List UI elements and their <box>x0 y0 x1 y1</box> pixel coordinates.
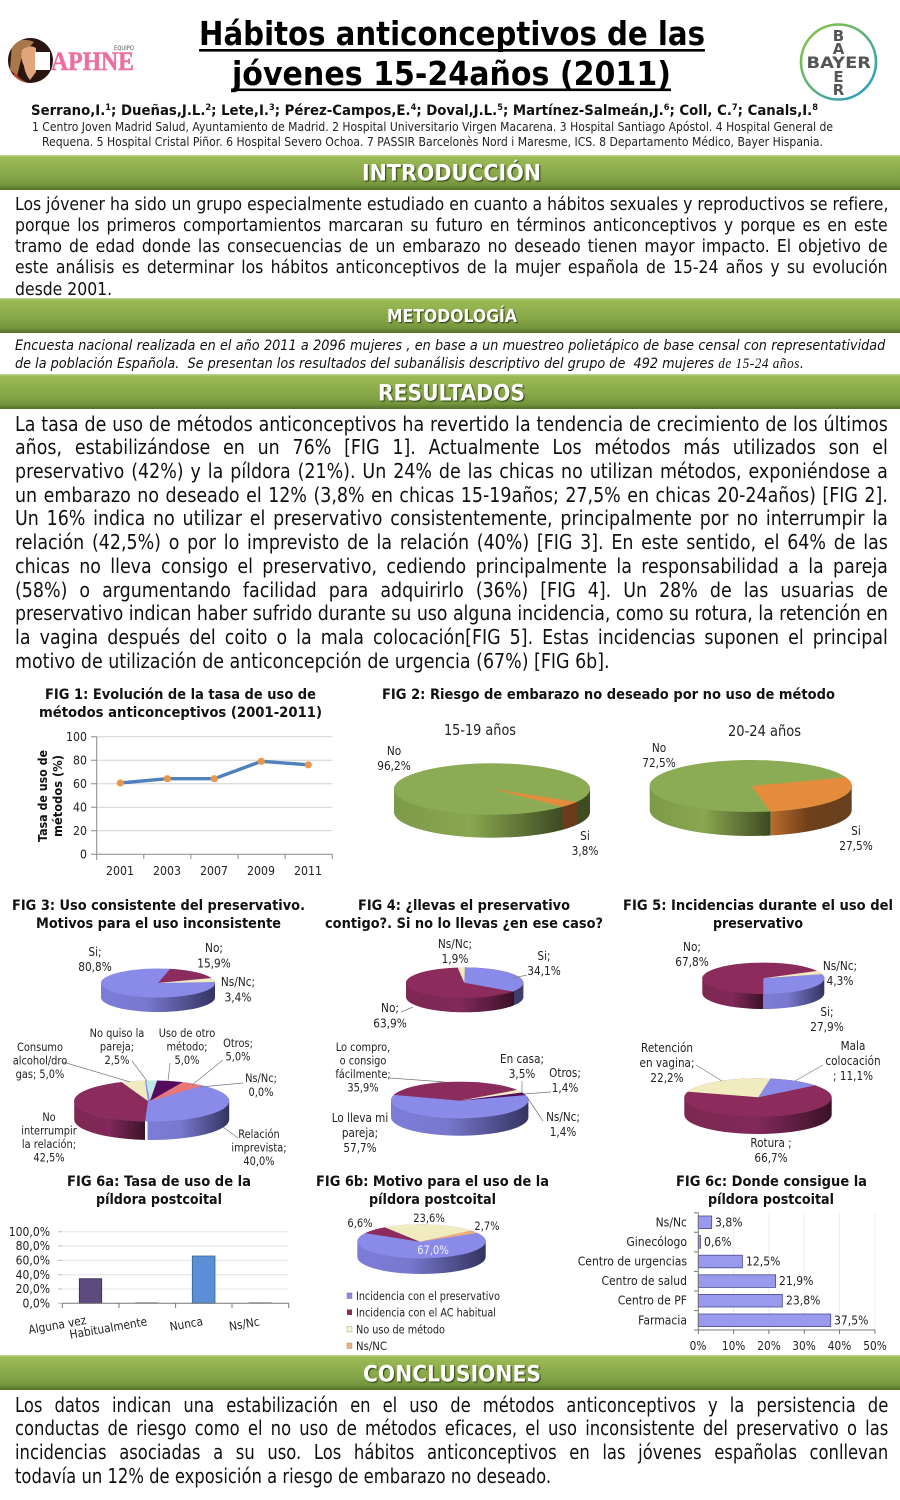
authors: 1 <box>105 103 111 113</box>
pie chart: fig 4 reasons: 57,7% <box>343 1141 377 1155</box>
bar chart: fig 6a: 20,0% <box>16 1281 50 1296</box>
line chart: fig 1: 20 <box>73 823 87 838</box>
pie chart: fig 4 carry: No; <box>381 1001 399 1015</box>
heading: fig 6a: FIG 6a: Tasa de uso de la <box>67 1174 251 1190</box>
pie chart: fig 2, 20-24 años: 27,5% <box>839 839 873 853</box>
text block: introducción <box>15 194 888 300</box>
pie chart: fig 5 incidents: No; <box>683 940 701 954</box>
title: Hábitos anticonceptivos de las <box>199 14 705 53</box>
text block: conclusiones: conductas de riesgo como el no uso de métodos eficaces, el uso inconsistente del preservativo o las <box>15 1416 888 1440</box>
line chart: fig 1: Tasa de uso de <box>35 750 50 842</box>
text block: introducción: tramo de edad donde las consecuencias de un embarazo no deseado tienen mayor impacto. El objetivo de <box>15 236 888 257</box>
pie chart: fig 3 reasons: Consumo <box>17 1041 63 1054</box>
pie chart: fig 2, 15-19 años <box>378 723 598 856</box>
pie chart: fig 4 carry <box>374 939 560 1029</box>
bar chart: fig 6c: 12,5% <box>746 1254 780 1269</box>
bar chart: fig 6a <box>9 1224 289 1342</box>
pie chart: fig 4 reasons: pareja; <box>342 1126 378 1140</box>
line chart: fig 1: 2009 <box>247 863 275 878</box>
pie chart: fig 4 reasons: Lo lleva mi <box>332 1111 388 1125</box>
pie chart: fig 3 reasons: método; <box>166 1041 208 1054</box>
heading: fig 6c <box>676 1174 867 1208</box>
authors: 6 <box>664 103 669 113</box>
bar chart: fig 6c: Ns/Nc <box>656 1215 687 1230</box>
heading: fig 1 <box>39 687 322 721</box>
pie chart: fig 3 reasons: la relación; <box>22 1138 76 1151</box>
pie chart: fig 5 types: en vagina; <box>640 1056 694 1070</box>
heading: fig 6c: píldora postcoital <box>708 1192 834 1208</box>
pie chart: fig 3 reasons: imprevista; <box>231 1142 287 1155</box>
pie chart: fig 5 incidents <box>676 942 856 1032</box>
pie chart: fig 5 types: Retención <box>641 1041 693 1055</box>
bar chart: fig 6a: Nunca <box>169 1315 204 1334</box>
section band: metodología <box>0 298 900 333</box>
line chart: fig 1: 80 <box>73 753 87 768</box>
authors: ; Lete,I. <box>211 103 269 119</box>
legend: fig 6b <box>347 1289 500 1353</box>
logo: Bayer: BAYER <box>806 53 871 72</box>
text block: resultados: (58%) o argumentando facilidad para adquirirlo (36%) [FIG 4]. Un 28% de las usuarias de <box>15 578 888 602</box>
affiliations <box>32 120 833 149</box>
pie chart: fig 2, 15-19 años: 15-19 años <box>444 721 516 739</box>
bar chart: fig 6a: Ns/Nc <box>228 1315 261 1334</box>
text block: metodología: Encuesta nacional realizada en el año 2011 a 2096 mujeres , en base a un muestreo polietápico de base censal con representatividad <box>15 337 885 354</box>
pie chart: fig 5 incidents: Ns/Nc; <box>823 959 857 973</box>
authors: Serrano,I. <box>31 103 112 119</box>
line chart: fig 1: 60 <box>73 776 87 791</box>
pie chart: fig 4 reasons: Lo compro, <box>336 1041 390 1054</box>
pie chart: fig 3 consistent use: 3,4% <box>225 991 252 1005</box>
section band: resultados <box>0 374 900 409</box>
authors: ; Dueñas,J.L. <box>111 103 205 119</box>
authors: ; Coll, C. <box>669 103 732 119</box>
pie chart: fig 4 reasons: 1,4% <box>550 1125 577 1139</box>
pie chart: fig 2, 20-24 años: No <box>652 741 666 755</box>
bar chart: fig 6c: 10% <box>722 1339 746 1353</box>
affiliations: Requena. 5 Hospital Cristal Piñor. 6 Hospital Severo Ochoa. 7 PASSIR Barcelonès Nord i Maresme, ICS. 8 Departamento Médico, Bayer Hispania. <box>42 135 823 149</box>
pie chart: fig 3 reasons: 40,0% <box>243 1155 275 1168</box>
pie chart: fig 5 types: ; 11,1% <box>833 1069 873 1083</box>
logo: Bayer: E <box>833 68 844 86</box>
pie chart: fig 3 reasons <box>13 1027 304 1170</box>
text block: resultados: un embarazo no deseado el 12% (3,8% en chicas 15-19años; 27,5% en chicas 20-24años) [FIG 2]. <box>15 483 888 507</box>
pie chart: fig 3 reasons: 5,0% <box>226 1051 250 1064</box>
pie chart: fig 4 reasons: 3,5% <box>509 1067 536 1081</box>
text block: introducción: Los jóvener ha sido un grupo especialmente estudiado en cuanto a hábitos sexuales y reproductivos se refiere, <box>15 194 888 215</box>
bar chart: fig 6c: Centro de PF <box>618 1293 687 1308</box>
logo: Bayer <box>801 24 876 100</box>
bar chart: fig 6c: 0% <box>690 1339 707 1353</box>
pie chart: fig 2, 20-24 años <box>643 724 872 852</box>
text block: introducción: este análisis es determinar los hábitos anticonceptivos de la mujer española de 15-24 años y su evolución <box>15 257 888 278</box>
bar chart: fig 6c: 30% <box>792 1339 816 1353</box>
heading: fig 4 <box>325 898 603 932</box>
pie chart: fig 4 carry: Si; <box>537 949 551 963</box>
line chart: fig 1: 2007 <box>200 863 228 878</box>
logo: Equipo Daphne <box>8 38 134 84</box>
pie chart: fig 3 consistent use: Si; <box>88 945 102 959</box>
text block: resultados: chicas no lleva consigo el preservativo, cediendo principalmente la responsabilidad a la pareja <box>15 554 888 578</box>
text block: resultados: motivo de utilización de anticoncepción de urgencia (67%) [FIG 6b]. <box>15 649 610 673</box>
bar chart: fig 6a: 0,0% <box>23 1296 50 1311</box>
pie chart: fig 4 reasons: 1,4% <box>552 1081 579 1095</box>
pie chart: fig 4 carry: 1,9% <box>442 952 469 966</box>
logo: Bayer: A <box>833 40 845 58</box>
line chart: fig 1 <box>35 729 332 878</box>
text block: conclusiones <box>15 1392 888 1488</box>
pie chart: fig 2, 15-19 años: 96,2% <box>377 759 411 773</box>
text block: metodología: de la población Española. Se presentan los resultados del subanálisis descriptivo del grupo de 492 mujeres de 15-24 años. <box>15 355 804 372</box>
text block: resultados: La tasa de uso de métodos anticonceptivos ha revertido la tendencia de crecimiento de los últimos <box>15 412 888 436</box>
heading: fig 6c: FIG 6c: Donde consigue la <box>676 1174 867 1190</box>
pie chart: fig 4 reasons: En casa; <box>500 1052 544 1066</box>
bar chart: fig 6c: 50% <box>863 1339 887 1353</box>
text block: resultados: años, estabilizándose en un 76% [FIG 1]. Actualmente Los métodos más utilizados son el <box>15 435 888 459</box>
pie chart: fig 3 reasons: Otros; <box>223 1037 253 1050</box>
authors: 2 <box>205 103 211 113</box>
section band: resultados: RESULTADOS <box>378 380 525 406</box>
section band: conclusiones <box>0 1355 900 1390</box>
pie chart: fig 5 types: Rotura ; <box>750 1136 792 1150</box>
pie chart: fig 3 reasons: 42,5% <box>33 1152 65 1165</box>
pie chart: fig 6b: 6,6% <box>347 1216 373 1230</box>
pie chart: fig 5 incidents: Si; <box>820 1005 834 1019</box>
pie chart: fig 4 reasons: fácilmente; <box>335 1068 391 1081</box>
text block: introducción: desde 2001. <box>15 278 112 300</box>
bar chart: fig 6c: 3,8% <box>715 1215 742 1230</box>
pie chart: fig 2, 20-24 años: 72,5% <box>642 756 676 770</box>
heading: fig 5 <box>623 898 893 932</box>
pie chart: fig 2, 15-19 años: Si <box>580 829 590 843</box>
bar chart: fig 6c: 21,9% <box>779 1273 813 1288</box>
text block: introducción: porque los primeros comportamientos marcaran su futuro en términos anticonceptivos y porque es en este <box>15 215 888 236</box>
pie chart: fig 3 consistent use: 15,9% <box>197 957 231 971</box>
bar chart: fig 6c: 37,5% <box>834 1313 868 1328</box>
pie chart: fig 3 reasons: 2,5% <box>105 1054 129 1067</box>
legend: fig 6b: No uso de método <box>356 1322 445 1336</box>
bar chart: fig 6c: Centro de salud <box>601 1273 687 1288</box>
pie chart: fig 3 consistent use: 80,8% <box>78 960 112 974</box>
pie chart: fig 6b <box>348 1214 499 1274</box>
affiliations: 1 Centro Joven Madrid Salud, Ayuntamiento de Madrid. 2 Hospital Universitario Virgen Macarena. 3 Hospital Santiago Apóstol. 4 Hospital General de <box>32 120 833 134</box>
heading: fig 1: FIG 1: Evolución de la tasa de uso de <box>45 687 316 703</box>
authors: 5 <box>497 103 503 113</box>
heading: fig 3: Motivos para el uso inconsistente <box>36 916 281 932</box>
pie chart: fig 3 consistent use: Ns/Nc; <box>221 975 255 989</box>
text block: resultados: preservativo indican haber sufrido durante su uso alguna incidencia, como su rotura, la retención en <box>15 601 888 625</box>
pie chart: fig 5 types: Mala <box>841 1039 865 1053</box>
heading: fig 3: FIG 3: Uso consistente del preservativo. <box>12 898 305 914</box>
pie chart: fig 4 reasons: o consigo <box>340 1055 386 1068</box>
pie chart: fig 5 types: colocación <box>825 1054 881 1068</box>
bar chart: fig 6c <box>578 1213 887 1353</box>
text block: resultados: relación (42,5%) o por lo imprevisto de la relación (40%) [FIG 3]. En este sentido, el 64% de las <box>15 530 888 554</box>
pie chart: fig 5 types: 22,2% <box>650 1071 684 1085</box>
section band: conclusiones: CONCLUSIONES <box>363 1362 541 1388</box>
bar chart: fig 6c: Farmacia <box>638 1313 687 1328</box>
text block: metodología <box>15 337 886 372</box>
section band: introducción <box>0 155 900 190</box>
bar chart: fig 6a: 80,0% <box>16 1238 50 1253</box>
logo: Bayer: B <box>833 27 844 45</box>
logo: Bayer: R <box>833 81 845 99</box>
pie chart: fig 2, 15-19 años: No <box>387 744 401 758</box>
line chart: fig 1: 2001 <box>106 863 134 878</box>
authors: 3 <box>269 103 275 113</box>
text block: conclusiones: incidencias asociadas a su uso. Los hábitos anticonceptivos en las jóvenes españolas conllevan <box>15 1440 888 1464</box>
line chart: fig 1: 100 <box>66 729 87 744</box>
pie chart: fig 2, 20-24 años: Si <box>851 824 861 838</box>
pie chart: fig 3 reasons: interrumpir <box>21 1125 77 1138</box>
pie chart: fig 3 reasons: 0,0% <box>249 1086 273 1099</box>
pie chart: fig 6b: 2,7% <box>474 1219 500 1233</box>
heading: fig 1: métodos anticonceptivos (2001-2011) <box>39 705 322 721</box>
bar chart: fig 6c: Ginecólogo <box>626 1234 687 1249</box>
authors: ; Pérez-Campos,E. <box>275 103 411 119</box>
pie chart: fig 2, 20-24 años: 20-24 años <box>728 722 801 740</box>
bar chart: fig 6c: Centro de urgencias <box>578 1254 687 1269</box>
pie chart: fig 3 reasons: alcohol/dro <box>13 1055 67 1068</box>
bar chart: fig 6a: 40,0% <box>16 1267 50 1282</box>
pie chart: fig 3 reasons: No quiso la <box>90 1027 144 1040</box>
bar chart: fig 6c: 20% <box>757 1339 781 1353</box>
heading: fig 6b: FIG 6b: Motivo para el uso de la <box>316 1174 549 1190</box>
pie chart: fig 3 consistent use: No; <box>205 941 223 955</box>
title: jóvenes 15-24años (2011) <box>230 54 671 93</box>
pie chart: fig 3 reasons: Ns/Nc; <box>245 1072 277 1085</box>
section band: metodología: METODOLOGÍA <box>387 305 517 327</box>
legend: fig 6b: Ns/NC <box>356 1339 387 1353</box>
line chart: fig 1: 2011 <box>294 863 322 878</box>
pie chart: fig 4 carry: Ns/Nc; <box>438 937 472 951</box>
pie chart: fig 3 reasons: pareja; <box>100 1041 134 1054</box>
authors: 4 <box>411 103 416 113</box>
pie chart: fig 4 carry: 34,1% <box>527 964 561 978</box>
pie chart: fig 3 reasons: Relación <box>238 1128 280 1141</box>
heading: fig 6a <box>67 1174 251 1208</box>
pie chart: fig 4 reasons: 35,9% <box>347 1082 379 1095</box>
title <box>199 14 705 93</box>
bar chart: fig 6a: 60,0% <box>16 1253 50 1268</box>
pie chart: fig 2, 15-19 años: 3,8% <box>572 844 599 858</box>
pie chart: fig 6b: 67,0% <box>417 1243 449 1257</box>
pie chart: fig 6b: 23,6% <box>413 1211 445 1225</box>
text block: conclusiones: Los datos indican una estabilización en el uso de métodos anticonceptivos y la persistencia de <box>15 1392 888 1416</box>
legend: fig 6b: Incidencia con el AC habitual <box>356 1306 496 1320</box>
heading: fig 6a: píldora postcoital <box>96 1192 222 1208</box>
line chart: fig 1: 40 <box>73 800 87 815</box>
pie chart: fig 4 reasons <box>332 1042 580 1154</box>
pie chart: fig 5 types: 66,7% <box>754 1151 788 1165</box>
authors: 7 <box>732 103 738 113</box>
pie chart: fig 3 reasons: 5,0% <box>175 1054 199 1067</box>
pie chart: fig 3 consistent use <box>79 943 254 1012</box>
text block: conclusiones: todavía un 12% de exposición a riesgo de embarazo no deseado. <box>15 1464 551 1488</box>
authors: 8 <box>812 103 818 113</box>
line chart: fig 1: 2003 <box>153 863 181 878</box>
authors: ; Martínez-Salmeán,J. <box>503 103 664 119</box>
pie chart: fig 5 incidents: 67,8% <box>675 955 709 969</box>
pie chart: fig 4 carry: 63,9% <box>373 1017 407 1031</box>
bar chart: fig 6c: 0,6% <box>704 1234 731 1249</box>
authors: ; Doval,J.L. <box>416 103 497 119</box>
logo: Equipo Daphne: EQUIPO <box>114 45 134 52</box>
bar chart: fig 6c: 23,8% <box>786 1293 820 1308</box>
section band: introducción: INTRODUCCIÓN <box>362 158 541 186</box>
heading: fig 2: FIG 2: Riesgo de embarazo no deseado por no uso de método <box>382 687 835 703</box>
text block: resultados: Un 16% indica no utilizar el preservativo consistentemente, principalmente por no interrumpir la <box>15 506 888 530</box>
pie chart: fig 4 reasons: Ns/Nc; <box>546 1110 580 1124</box>
pie chart: fig 4 reasons: Otros; <box>549 1066 581 1080</box>
text block: resultados: preservativo (42%) y la píldora (21%). Un 24% de las chicas no utilizan métodos, exponiéndose a <box>15 459 888 483</box>
line chart: fig 1: métodos (%) <box>50 755 65 837</box>
pie chart: fig 5 incidents: 4,3% <box>827 974 854 988</box>
bar chart: fig 6a: 100,0% <box>9 1224 50 1239</box>
heading: fig 4: FIG 4: ¿llevas el preservativo <box>358 898 570 914</box>
bar chart: fig 6c: 40% <box>828 1339 851 1353</box>
heading: fig 6b <box>316 1174 549 1208</box>
pie chart: fig 5 incidents: 27,9% <box>810 1020 844 1034</box>
text block: resultados: la vagina después del coito o la mala colocación[FIG 5]. Estas incidencias suponen el principal <box>15 625 888 649</box>
authors: ; Canals,I. <box>738 103 812 119</box>
pie chart: fig 3 reasons: No <box>42 1111 56 1124</box>
bar chart: fig 6a: Habitualmente <box>69 1315 148 1342</box>
bar chart: fig 6a: Alguna vez <box>27 1313 87 1337</box>
heading: fig 3 <box>12 898 305 932</box>
pie chart: fig 3 reasons: gas; 5,0% <box>16 1068 64 1081</box>
heading: fig 4: contigo?. Si no lo llevas ¿en ese caso? <box>325 916 603 932</box>
legend: fig 6b: Incidencia con el preservativo <box>356 1289 500 1303</box>
line chart: fig 1: 0 <box>80 847 87 862</box>
heading: fig 5: preservativo <box>713 916 803 932</box>
text block: resultados <box>15 412 888 673</box>
pie chart: fig 3 reasons: Uso de otro <box>159 1027 215 1040</box>
logo: Equipo Daphne: APHNE <box>51 47 134 76</box>
pie chart: fig 5 types <box>640 1040 880 1164</box>
heading: fig 6b: píldora postcoital <box>369 1192 496 1208</box>
